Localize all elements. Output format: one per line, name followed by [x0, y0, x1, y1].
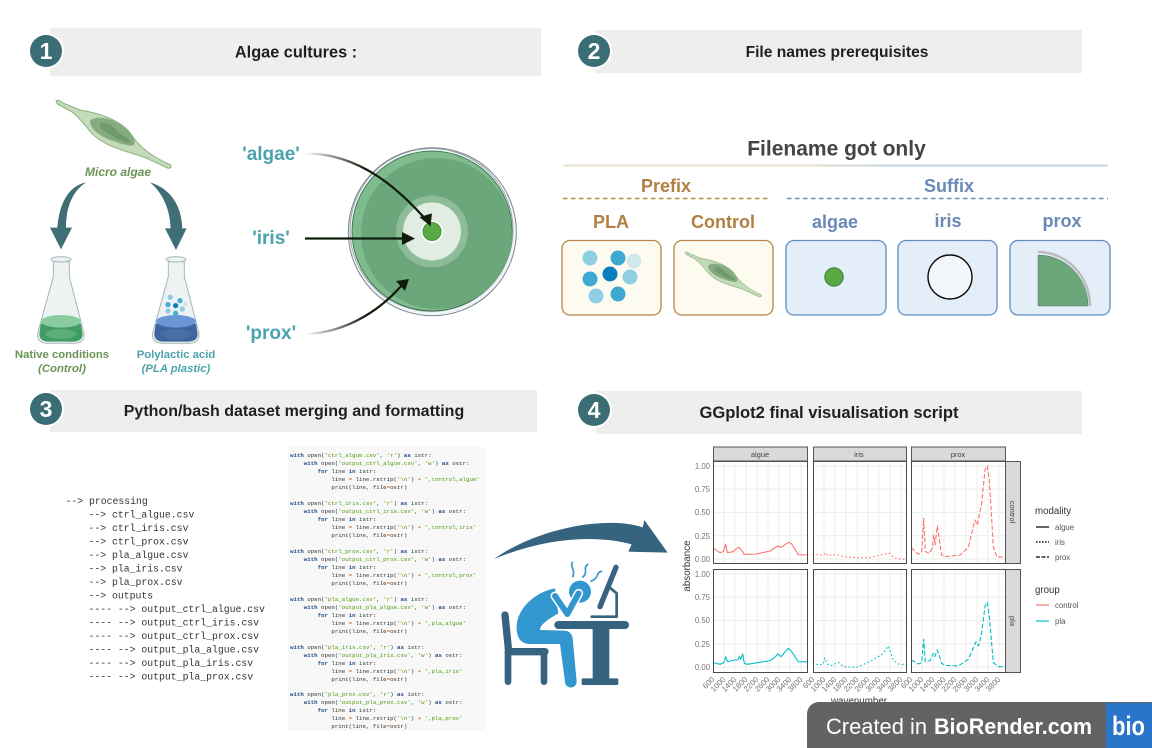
arrow: iris: [305, 232, 415, 245]
label: algae: 'algae': [242, 144, 300, 165]
panel: file names: [562, 138, 1110, 315]
header: algae cultures: Algae cultures :: [235, 44, 357, 62]
x axis labels: 1000: [809, 675, 828, 694]
code block: python script: print(line, file=ostr): [331, 580, 407, 587]
label: prox: prox: [1042, 211, 1082, 231]
x axis labels: 1800: [929, 675, 948, 694]
y axis labels: [695, 462, 711, 672]
label: Control: Control: [691, 212, 755, 232]
legend: group: group: [1035, 585, 1060, 596]
box: PLA: [562, 240, 661, 315]
legend: modality: [1035, 506, 1074, 562]
x axis labels: 3800: [984, 675, 1003, 694]
text block: directory listing: --> pla_algue.csv: [88, 550, 189, 561]
y axis labels: 1.00: [695, 570, 711, 579]
text block: directory listing: --> pla_iris.csv: [88, 564, 183, 574]
arrow: to control flask: [50, 182, 86, 249]
panel: algae cultures: [15, 100, 516, 375]
y axis labels: 0.25: [695, 640, 711, 649]
badge 2: [576, 33, 612, 69]
box: algae: [786, 240, 886, 315]
strip labels: iris: [854, 450, 864, 459]
strip labels: control: [1008, 501, 1017, 524]
code block: python script: print(line, file=ostr): [331, 532, 407, 539]
label: control: (Control): [38, 363, 86, 375]
label: PLA: PLA: [593, 212, 629, 232]
text block: directory listing: ---- --> output_ctrl_iris.csv: [88, 618, 259, 628]
x axis labels: 3800: [786, 675, 805, 694]
x axis labels: 600: [801, 675, 817, 691]
box: prox: [1010, 240, 1110, 315]
code block: python script: line = line.rstrip('\n') + ',pla,iris': [331, 668, 463, 675]
label: iris: 'iris': [252, 228, 290, 249]
code block: python script: with open('output_ctrl_prox.csv', 'w') as ostr:: [304, 556, 466, 563]
code block: python script: with open('output_ctrl_algue.csv', 'w') as ostr:: [304, 460, 470, 467]
x axis labels: 2200: [742, 675, 761, 694]
x axis labels: 3400: [973, 675, 992, 694]
code block: python script: print(line, file=ostr): [331, 676, 407, 683]
x axis labels: 600: [899, 675, 915, 691]
badge: created in BioRender: bio: [1112, 711, 1145, 741]
arrow: to PLA flask: [150, 182, 187, 250]
x axis labels: 1400: [720, 675, 739, 694]
x axis labels: 2600: [753, 675, 772, 694]
code block: python script: line = line.rstrip('\n') + ',pla,algue': [331, 620, 466, 627]
x axis labels: 3800: [886, 675, 905, 694]
strip labels: [751, 450, 1017, 627]
text block: directory listing: --> ctrl_iris.csv: [88, 523, 189, 534]
text block: directory listing: --> ctrl_prox.csv: [88, 536, 189, 548]
text block: directory listing: [66, 496, 265, 682]
label: prox: 'prox': [246, 323, 296, 344]
x axis labels: 3000: [764, 675, 783, 694]
code block: python script: with open('output_pla_iris.csv', 'w') as ostr:: [304, 652, 463, 659]
header: python bash: Python/bash dataset merging and formatting: [124, 403, 464, 420]
code block: python script: print(line, file=ostr): [331, 628, 407, 635]
box: Control: [674, 240, 773, 315]
badge: created in BioRender: BioRender.com: [934, 714, 1092, 739]
header: file names: File names prerequisites: [746, 44, 929, 61]
icon: micro algae: [56, 100, 171, 168]
y axis labels: 0.25: [695, 532, 711, 541]
code block: python script: for line in istr:: [318, 707, 376, 714]
code block: python script: with open('ctrl_iris.csv', 'r') as istr:: [290, 500, 428, 507]
badge: created in BioRender: [807, 702, 1152, 748]
x axis labels: 1400: [820, 675, 839, 694]
legend: modality: prox: [1055, 553, 1070, 562]
label: micro algae: Micro algae: [85, 165, 151, 179]
badge: created in BioRender: Created in: [826, 714, 927, 739]
arrow: prox: [305, 279, 409, 334]
text block: directory listing: --> processing: [66, 496, 148, 507]
code block: python script: for line in istr:: [318, 468, 376, 475]
label: native conditions: Native conditions: [15, 349, 109, 361]
badge 4: 4: [588, 397, 601, 423]
badge 3: [28, 391, 64, 427]
text block: directory listing: ---- --> output_pla_prox.csv: [88, 672, 253, 682]
text block: directory listing: ---- --> output_ctrl_algue.csv: [88, 604, 265, 615]
code block: python script: with open('pla_iris.csv', 'r') as istr:: [290, 644, 425, 651]
code block: python script: with open('ctrl_algue.csv', 'r') as istr:: [290, 452, 432, 459]
x axis labels: [701, 675, 1003, 694]
box: iris: [898, 240, 997, 315]
badge 3: 3: [40, 396, 52, 422]
label: iris: iris: [934, 211, 962, 231]
text block: directory listing: --> outputs: [88, 590, 153, 602]
code block: python script: line = line.rstrip('\n') + ',control,algue': [331, 476, 480, 483]
grid panels: [713, 461, 1005, 672]
strip labels: algue: [751, 450, 769, 459]
code block: python script: with open('ctrl_prox.csv', 'r') as istr:: [290, 548, 428, 555]
legend: modality: algue: [1055, 523, 1074, 532]
legend: group: pla: [1055, 617, 1066, 626]
badge 1: 1: [40, 38, 53, 64]
y axis labels: 0.75: [695, 485, 711, 494]
label: PLA plastic: (PLA plastic): [142, 363, 211, 375]
axis title: absorbance: absorbance: [682, 540, 693, 592]
legend: modality: modality: [1035, 506, 1071, 517]
icon: PLA flask: [153, 257, 199, 343]
x axis labels: 2600: [853, 675, 872, 694]
code block: python script: with open('pla_algue.csv', 'r') as istr:: [290, 596, 428, 603]
legend: modality: iris: [1055, 538, 1065, 547]
code block: python script: line = line.rstrip('\n') + ',pla,prox': [331, 715, 463, 722]
badge 4: [576, 392, 612, 428]
icon: stressed person at desk: [505, 562, 625, 687]
text block: directory listing: --> pla_prox.csv: [88, 577, 183, 588]
y axis labels: 0.50: [695, 508, 711, 517]
x axis labels: 1800: [831, 675, 850, 694]
y axis labels: 0.50: [695, 616, 711, 625]
heading: prefix: Prefix: [641, 176, 691, 196]
badge 1: [28, 33, 64, 69]
curves: control: [713, 466, 1005, 559]
code block: python script: for line in istr:: [318, 516, 376, 523]
chart: ggplot facets: [682, 447, 1079, 707]
x axis labels: 3000: [864, 675, 883, 694]
x axis labels: 1000: [709, 675, 728, 694]
heading: suffix: Suffix: [924, 176, 974, 196]
code block: python script: print(line, file=ostr): [331, 723, 407, 730]
y axis labels: 1.00: [695, 462, 711, 471]
x axis labels: 1400: [918, 675, 937, 694]
code block: python script: with open('output_pla_algue.csv', 'w') as ostr:: [304, 604, 466, 611]
header: ggplot2: [596, 391, 1082, 434]
y axis labels: 0.75: [695, 593, 711, 602]
x axis labels: 1800: [731, 675, 750, 694]
title: filename got only: Filename got only: [747, 138, 926, 160]
text block: directory listing: ---- --> output_pla_iris.csv: [88, 658, 253, 669]
x axis labels: 3400: [875, 675, 894, 694]
code block: python script: for line in istr:: [318, 564, 376, 571]
panel borders and strips: [714, 447, 1020, 672]
strip labels: pla: [1008, 616, 1017, 627]
axis title: wavenumber: wavenumber: [830, 696, 888, 707]
code block: python script: [288, 447, 486, 731]
code block: python script: for line in istr:: [318, 660, 376, 667]
strip labels: prox: [951, 450, 966, 459]
badge 2: 2: [588, 38, 600, 64]
y axis labels: 0.00: [695, 555, 711, 564]
legend: group: control: [1055, 601, 1079, 610]
x axis labels: 1000: [907, 675, 926, 694]
header: algae cultures: [50, 28, 541, 76]
label: algae: algae: [812, 212, 858, 232]
arrow: script to plot: [494, 520, 668, 559]
petri dish: [348, 148, 516, 316]
x axis labels: 600: [701, 675, 717, 691]
icon: control flask: [38, 257, 84, 343]
header: python bash: [50, 390, 537, 432]
curves: pla: [713, 602, 1005, 667]
header: ggplot2: GGplot2 final visualisation script: [699, 403, 959, 422]
code block: python script: line = line.rstrip('\n') + ',control,iris': [331, 524, 476, 531]
code block: python script: with open('output_ctrl_iris.csv', 'w') as ostr:: [304, 508, 466, 515]
code block: python script: with open('pla_prox.csv', 'r') as istr:: [290, 691, 425, 698]
x axis labels: 2200: [940, 675, 959, 694]
code block: python script: print(line, file=ostr): [331, 484, 407, 491]
code block: python script: for line in istr:: [318, 612, 376, 619]
x axis labels: 2600: [951, 675, 970, 694]
legend: group: [1035, 585, 1079, 626]
text block: directory listing: ---- --> output_ctrl_prox.csv: [88, 631, 259, 642]
code block: python script: with open('output_pla_prox.csv', 'w') as ostr:: [304, 699, 463, 706]
text block: directory listing: --> ctrl_algue.csv: [88, 510, 194, 520]
x axis labels: 2200: [842, 675, 861, 694]
label: polylactic acid: Polylactic acid: [137, 349, 215, 361]
y axis labels: 0.00: [695, 663, 711, 672]
text block: directory listing: ---- --> output_pla_algue.csv: [88, 644, 259, 656]
header: file names: [595, 30, 1082, 73]
arrow: algae: [305, 153, 432, 226]
x axis labels: 3400: [775, 675, 794, 694]
code block: python script: line = line.rstrip('\n') + ',control,prox': [331, 572, 476, 579]
x axis labels: 3000: [962, 675, 981, 694]
